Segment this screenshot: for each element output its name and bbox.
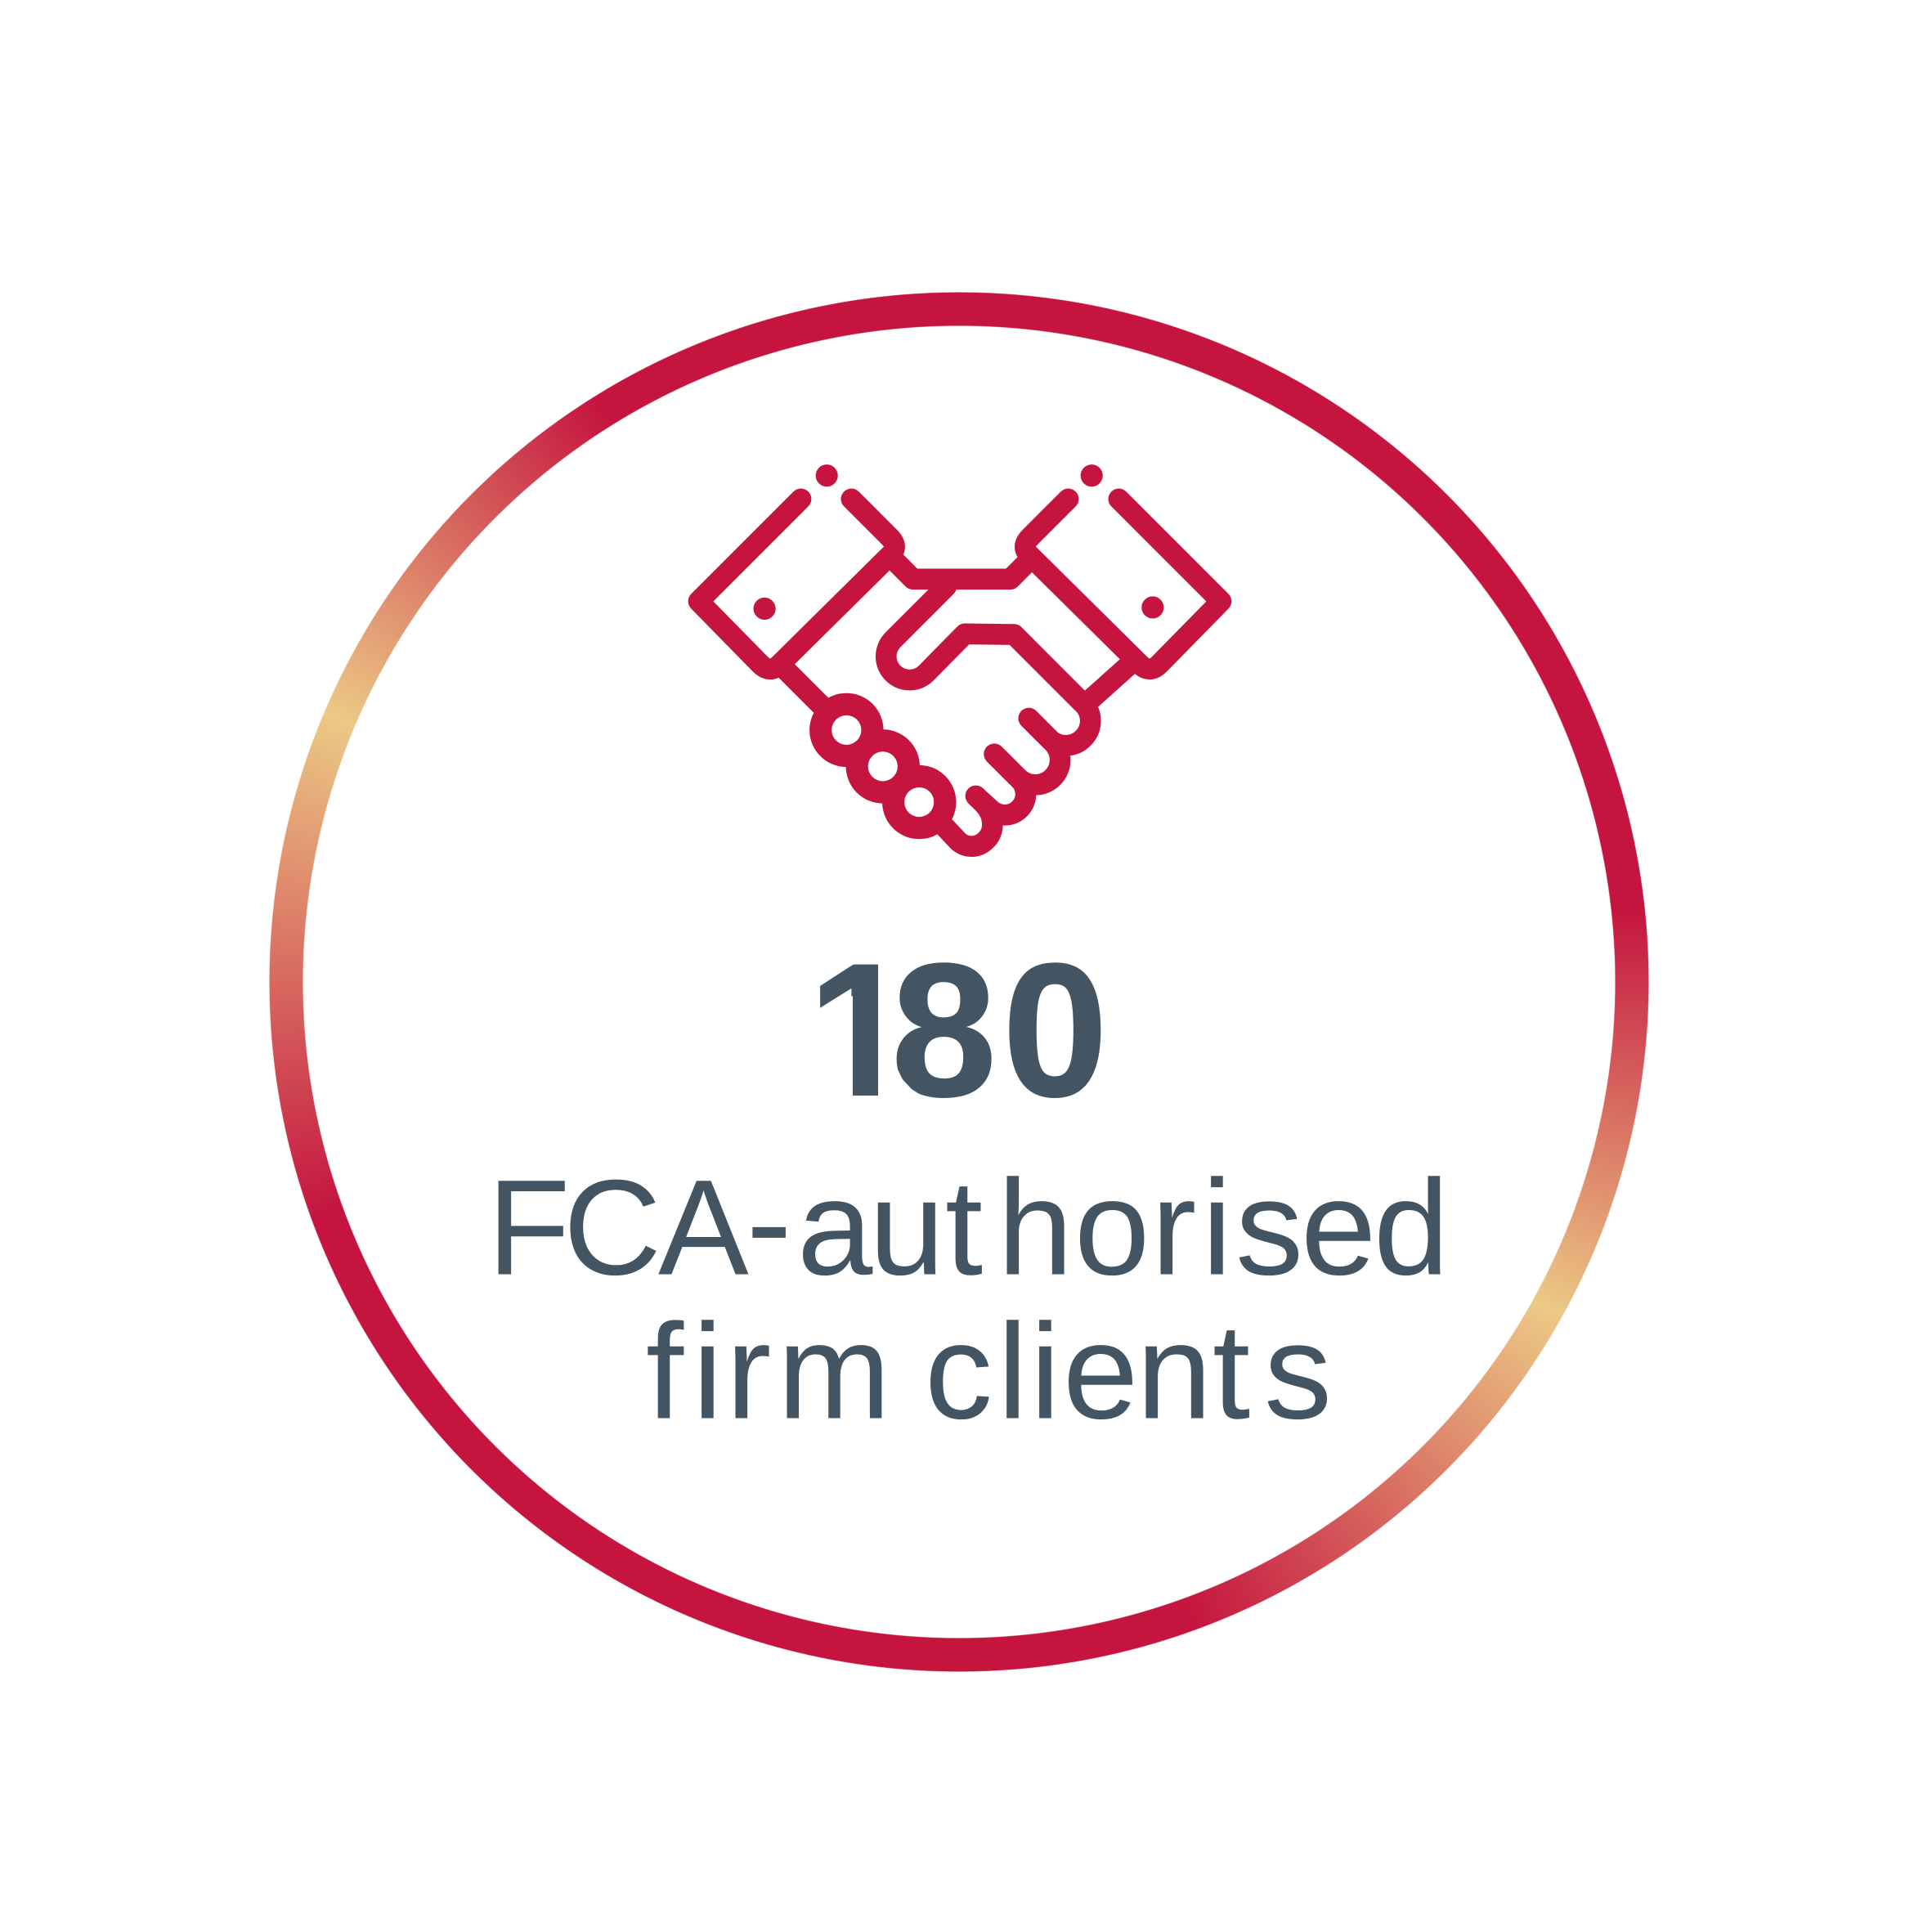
left arm (780, 664, 822, 706)
sleeve bar (896, 562, 1026, 579)
label: FCA-authorised firm clients (487, 1146, 1449, 1447)
third finger (976, 754, 1026, 815)
gradient ring (268, 292, 1648, 1672)
second finger (994, 719, 1060, 785)
cuff dots (754, 464, 1163, 620)
left hand knuckles (809, 693, 956, 839)
left cuff (698, 499, 894, 669)
icon: handshake (698, 464, 1221, 846)
infographic canvas (269, 292, 1649, 1672)
right arm (1092, 661, 1133, 698)
stat content (499, 464, 1441, 1419)
label line 2: firm clients (646, 1297, 1332, 1447)
label line 1: FCA-authorised (487, 1146, 1449, 1303)
number: 180: 180 (808, 925, 1108, 1136)
right cuff (1025, 499, 1221, 669)
fourth finger (939, 796, 993, 846)
upper hand and first finger (886, 586, 1091, 746)
